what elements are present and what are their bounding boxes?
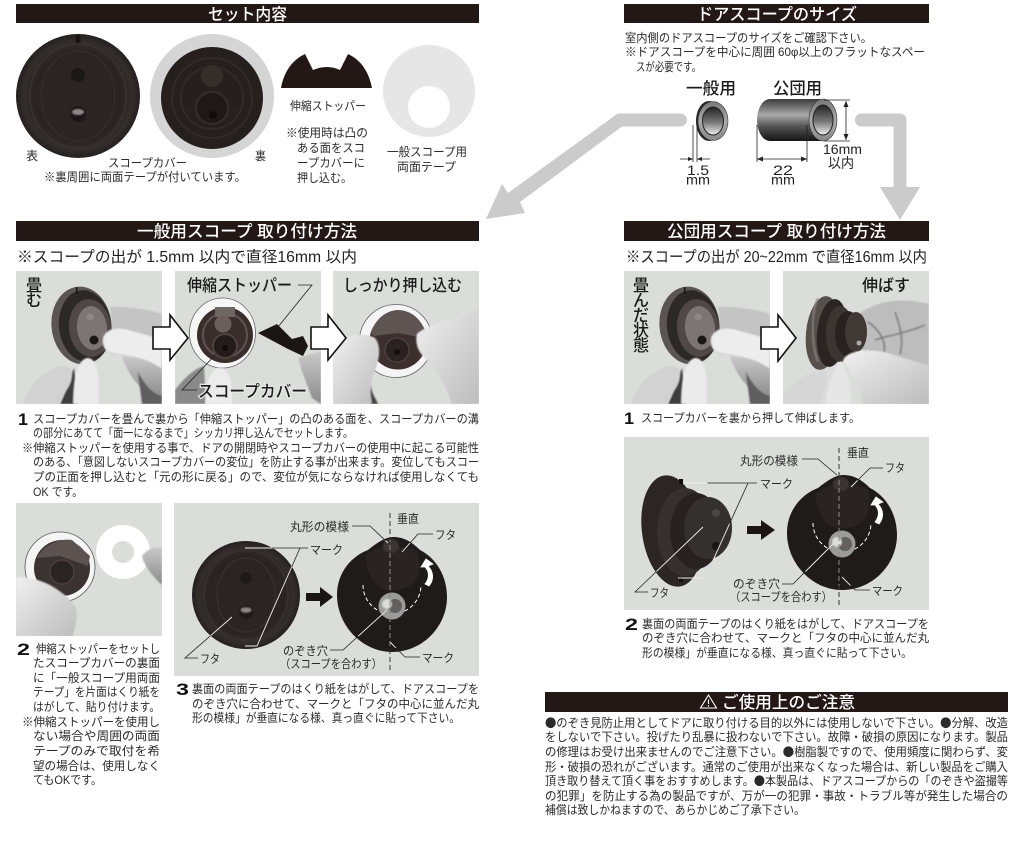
- photo: folded state: [624, 271, 770, 404]
- arrow: step two to three: [311, 315, 346, 360]
- note: stopper usage: 押し込む。: [297, 171, 352, 185]
- title: set contents: セット内容: [208, 5, 287, 24]
- icon: general scope ring: [696, 101, 728, 141]
- panel: alignment diagram (apartment): 丸形の模様: [740, 454, 798, 468]
- title: door scope size: [624, 4, 929, 24]
- text: cautions: ●のぞき見防止用としてドアに取り付ける目的以外には使用しないで下さい。●分解、改造: [545, 714, 1008, 731]
- label: tape: 一般スコープ用: [387, 145, 467, 159]
- icon: scope cover back: [150, 34, 274, 158]
- text: cautions: 形・破損の恐れがございます。通常のご使用が出来なくなった場合は、新しい製品をご購入: [545, 758, 1008, 775]
- photo: folded state: 状: [633, 321, 649, 340]
- step 1 text: ※伸縮ストッパーを使用する事で、ドアの開閉時やスコープカバーの使用中に起こる可能性: [22, 441, 479, 455]
- step 2 text (apartment): [642, 617, 929, 660]
- label: stopper: 伸縮ストッパー: [290, 99, 366, 113]
- panel: alignment diagram (apartment): 垂直: [847, 446, 869, 460]
- icon: cover on door: [787, 475, 897, 590]
- step 1 text: の部分にあてて「面一になるまで」シッカリ押し込んでセットします。: [33, 426, 353, 440]
- note: stopper usage: [286, 126, 368, 185]
- text: size instructions: 室内側のドアスコープのサイズをご確認下さい。: [625, 31, 872, 45]
- title: set contents: [16, 4, 479, 24]
- arrow: step one to two: [153, 315, 188, 360]
- step 1 number: 1: [18, 410, 28, 429]
- photo: folded state: ん: [633, 292, 649, 310]
- step 2 text (apartment): のぞき穴に合わせて、マークと「フタの中心に並んだ丸: [642, 631, 929, 645]
- text: cautions: の修理はお受け出来ませんのでご注意下さい。●樹脂製ですので、使用頻度に関わらず、変: [545, 743, 1008, 760]
- icon: double-sided tape: [383, 45, 475, 137]
- step 2 text (apartment): 形の模様」が垂直になる様、真っ直ぐに貼って下さい。: [642, 646, 912, 660]
- note: tape on back: ※裏周囲に両面テープが付いています。: [44, 170, 246, 184]
- text: cautions: [545, 714, 1008, 818]
- panel: alignment diagram (general): マーク: [310, 543, 343, 557]
- arrow: grey to left section: [486, 114, 687, 219]
- step 2 text: はがして、貼り付けます。: [33, 700, 160, 714]
- dimension: 22mm: mm: [771, 172, 795, 188]
- photo: attaching tape: [16, 503, 162, 636]
- panel: alignment diagram (apartment): のぞき穴: [733, 577, 780, 591]
- step 3 number: 3: [176, 680, 189, 699]
- arrow: grey to right section: [855, 114, 920, 220]
- icon: telescopic stopper: [281, 54, 372, 88]
- icon: arrow right: [747, 520, 775, 540]
- panel: alignment diagram (general): フタ: [200, 652, 220, 666]
- panel: alignment diagram (general): のぞき穴: [283, 644, 328, 658]
- icon: apartment scope cylinder: [757, 99, 837, 141]
- step 3 text: [192, 682, 479, 725]
- step 2 number: 2: [17, 640, 30, 659]
- step 3 text: 裏面の両面テープのはくり紙をはがして、ドアスコープを: [192, 682, 479, 696]
- panel: alignment diagram (general): マーク: [422, 651, 454, 665]
- icon: warning triangle: [700, 695, 716, 708]
- panel: alignment diagram (general): フタ: [435, 528, 456, 542]
- label: front: 表: [26, 149, 38, 163]
- text: size instructions: ※ドアスコープを中心に周囲 60φ以上のフラットなスペー: [625, 45, 925, 59]
- icon: arrow right: [306, 587, 333, 607]
- step 2 text: テープのみで取付を希: [33, 744, 160, 758]
- photo: folding cover: [16, 271, 162, 404]
- dimension: 16mm: [823, 100, 862, 171]
- note: stopper usage: ※使用時は凸の: [286, 126, 368, 140]
- title: cautions: ご使用上のご注意: [722, 693, 855, 712]
- icon: stretched cover: [634, 471, 732, 591]
- step 2 text: ない場合や周囲の両面: [33, 729, 160, 743]
- title: apartment scope installation: 公団用スコープ 取り付け方法: [667, 222, 886, 241]
- photo: pressing firmly: しっかり押し込む: [343, 276, 462, 295]
- step 2 text: たスコープカバーの裏面: [33, 656, 160, 670]
- dimension: 16mm: 16mm: [823, 141, 862, 157]
- dimension: 1.5mm: 1.5: [687, 162, 709, 178]
- panel: alignment diagram (apartment): [624, 437, 929, 610]
- step 3 text: のぞき穴に合わせて、マークと「フタの中心に並んだ丸: [192, 697, 479, 711]
- step 2 text (apartment): 裏面の両面テープのはくり紙をはがして、ドアスコープを: [642, 617, 929, 631]
- note: stopper usage: ある面をスコ: [297, 141, 365, 155]
- photo: folded state: 態: [633, 336, 649, 355]
- photo: stretched: 伸ばす: [862, 276, 910, 295]
- title: cautions: [545, 692, 1008, 712]
- title: door scope size: ドアスコープのサイズ: [697, 4, 857, 24]
- step 2 text: [22, 642, 160, 787]
- label: scope cover: スコープカバー: [108, 156, 187, 170]
- step 2 text: テープ」を片面はくり紙を: [33, 685, 160, 699]
- step 1 number (apartment): 1: [624, 409, 634, 428]
- step 1 text: スコープカバーを畳んで裏から「伸縮ストッパー」の凸のある面を、スコープカバーの溝: [33, 412, 479, 426]
- photo: inserting stopper: 伸縮ストッパー: [187, 276, 292, 295]
- panel: alignment diagram (apartment): マーク: [872, 584, 903, 598]
- dimension: 16mm: 以内: [828, 155, 854, 171]
- photo: folding cover: 畳: [26, 276, 42, 295]
- photo: folded state: 畳: [633, 276, 649, 295]
- step 2 text: に「一般スコープ用両面: [33, 671, 160, 685]
- step 3 text: 形の模様」が垂直になる様、真っ直ぐに貼って下さい。: [192, 711, 460, 725]
- panel: alignment diagram (general): 丸形の模様: [290, 520, 349, 534]
- dimension: 1.5mm: mm: [686, 172, 710, 188]
- heading: apartment use: 公団用: [773, 79, 822, 98]
- panel: alignment diagram (apartment): （スコープを合わす）: [730, 590, 832, 604]
- photo: pressing firmly: [333, 271, 479, 404]
- subheading: apartment scope requirement: ※スコープの出が 20~22mm で直径16mm 以内: [626, 248, 927, 266]
- icon: cover front: [192, 541, 300, 649]
- step 1 text (apartment): スコープカバーを裏から押して伸ばします。: [641, 411, 860, 425]
- title: apartment scope installation: [624, 221, 929, 241]
- photo: folding cover: む: [26, 291, 42, 310]
- step 1 text: [22, 412, 479, 499]
- text: cautions: の犯罪」を防止する為の製品ですが、万が一の犯罪・事故・トラブル等が発生した場合の: [545, 787, 1008, 804]
- panel: alignment diagram (general): [174, 503, 479, 676]
- subheading: general scope requirement: ※スコープの出が 1.5mm 以内で直径16mm 以内: [17, 248, 357, 266]
- photo: stretched: [783, 271, 929, 404]
- step 2 text: 望の場合は、使用しなく: [33, 759, 160, 773]
- step 1 text: のある、「意図しないスコープカバーの変位」を防止する事が出来ます。変位してもスコー: [33, 455, 479, 469]
- step 1 text: OK です。: [33, 485, 83, 499]
- dimension: 22mm: 22: [773, 162, 793, 178]
- photo: folded state: だ: [633, 307, 649, 325]
- text: size instructions: スが必要です。: [636, 60, 701, 74]
- text: cautions: をしないで下さい。投げたり乱暴に扱わないで下さい。故障・破損の原因になります。製品: [545, 728, 1008, 745]
- title: general scope installation: [16, 221, 479, 241]
- label: tape: [387, 145, 467, 174]
- label: tape: 両面テープ: [397, 160, 456, 174]
- title: general scope installation: 一般用スコープ 取り付け方法: [137, 222, 357, 241]
- panel: alignment diagram (apartment): フタ: [885, 461, 905, 475]
- arrow: folded to stretched: [761, 315, 796, 361]
- panel: alignment diagram (apartment): マーク: [760, 477, 793, 491]
- text: size instructions: [625, 31, 925, 74]
- step 2 number (apartment): 2: [625, 615, 638, 634]
- step 2 text: ※伸縮ストッパーを使用し: [22, 715, 160, 729]
- step 1 text: プの正面を押し込むと「元の形に戻る」ので、変位が気にならなければ使用しなくても: [33, 470, 479, 484]
- heading: general use: 一般用: [686, 79, 736, 98]
- panel: alignment diagram (apartment): フタ: [650, 586, 669, 600]
- label: back: 裏: [255, 149, 266, 163]
- icon: cover on door: [337, 537, 447, 652]
- note: stopper usage: ープカバーに: [297, 156, 365, 170]
- step 2 text: てもOKです。: [33, 773, 102, 787]
- photo: inserting stopper: [175, 271, 321, 404]
- step 2 text: 伸縮ストッパーをセットし: [36, 642, 160, 656]
- photo: inserting stopper: スコープカバー: [198, 382, 307, 401]
- panel: alignment diagram (general): 垂直: [397, 512, 419, 526]
- dimension: 22mm: [757, 125, 807, 188]
- dimension: 1.5mm: [680, 125, 710, 188]
- icon: scope cover front: [16, 34, 140, 158]
- panel: alignment diagram (general): （スコープを合わす）: [280, 657, 382, 671]
- text: cautions: 補償は致しかねますので、あらかじめご了承下さい。: [545, 801, 805, 818]
